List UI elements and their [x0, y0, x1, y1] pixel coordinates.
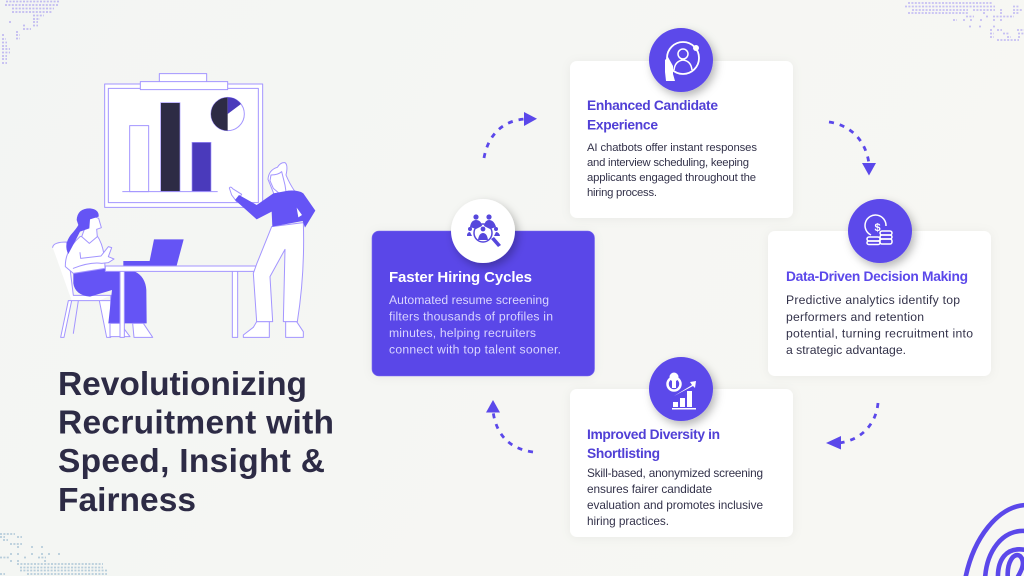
title: Revolutionizing: [58, 366, 307, 403]
title: Speed, Insight &: [58, 443, 325, 480]
shoes: [243, 322, 303, 337]
illustration: office presentation: [53, 74, 315, 337]
body text: evaluation and promotes inclusive: [587, 498, 763, 512]
body text: hiring process.: [587, 187, 657, 199]
dot pattern: top right: [905, 3, 1024, 40]
pie chart on whiteboard: [211, 97, 244, 131]
title: Recruitment with: [58, 404, 334, 442]
body text: applicants engaged throughout the: [587, 172, 756, 184]
icon: candidate in circle with hand: [649, 28, 713, 92]
heading: [587, 98, 718, 132]
body text: and interview scheduling, keeping: [587, 157, 749, 169]
body text: Automated resume screening: [389, 293, 549, 307]
sweater: [235, 191, 315, 228]
panel: data-driven decision making: [768, 199, 991, 376]
body text: [587, 466, 763, 528]
title: [58, 366, 334, 519]
hair and face: [268, 163, 295, 197]
trousers: [253, 223, 304, 322]
hair: [66, 208, 99, 254]
standing woman: [229, 163, 315, 337]
whiteboard: [105, 74, 263, 207]
arrow: candidate experience to data-driven: [829, 122, 876, 176]
arrow: faster hiring to candidate experience: [484, 112, 537, 158]
hand: [229, 187, 242, 202]
body text: potential, turning recruitment into: [786, 326, 973, 340]
face: [82, 215, 101, 243]
panel: faster hiring cycles: [372, 199, 594, 376]
body text: [587, 142, 757, 199]
chair: [53, 242, 112, 337]
body text: Predictive analytics identify top: [786, 293, 960, 307]
body text: performers and retention: [786, 310, 924, 324]
heading: Shortlisting: [587, 446, 660, 461]
arm and hand: [73, 247, 114, 268]
heading: Faster Hiring Cycles: [389, 269, 532, 286]
shirt: [65, 235, 105, 273]
decorative fingerprint swirl: bottom right: [965, 505, 1024, 576]
body text: AI chatbots offer instant responses: [587, 142, 757, 154]
trousers: [73, 268, 147, 323]
panel: improved diversity in shortlisting: [570, 357, 793, 537]
seated woman: [65, 208, 153, 337]
body text: hiring practices.: [587, 514, 669, 528]
title: Fairness: [58, 482, 196, 519]
body text: connect with top talent sooner.: [389, 342, 561, 356]
heading: [587, 427, 720, 461]
body text: minutes, helping recruiters: [389, 326, 536, 340]
icon: people under magnifying glass: [451, 199, 515, 263]
dot pattern: bottom left: [0, 534, 107, 574]
body text: [389, 293, 561, 356]
shoes: [110, 323, 153, 337]
heading: Experience: [587, 118, 658, 132]
body text: ensures fairer candidate: [587, 482, 712, 496]
body text: [786, 293, 973, 357]
dot pattern: top left: [2, 2, 59, 63]
body text: filters thousands of profiles in: [389, 310, 553, 324]
body text: a strategic advantage.: [786, 343, 906, 357]
bar chart on whiteboard: [122, 103, 218, 192]
table with laptop: [105, 239, 261, 337]
icon: dollar coin and coin stacks: $: [874, 222, 881, 234]
body text: Skill-based, anonymized screening: [587, 466, 763, 480]
heading: Data-Driven Decision Making: [786, 269, 968, 284]
heading: Improved Diversity in: [587, 427, 720, 442]
icon: dollar coin and coin stacks: [848, 199, 912, 263]
heading: Enhanced Candidate: [587, 98, 718, 113]
arrow: improved diversity to faster hiring: [486, 400, 533, 452]
panel: enhanced candidate experience: [570, 28, 793, 218]
arrow: data-driven to improved diversity: [826, 403, 878, 450]
icon: lightbulb gear with growth bars: [649, 357, 713, 421]
